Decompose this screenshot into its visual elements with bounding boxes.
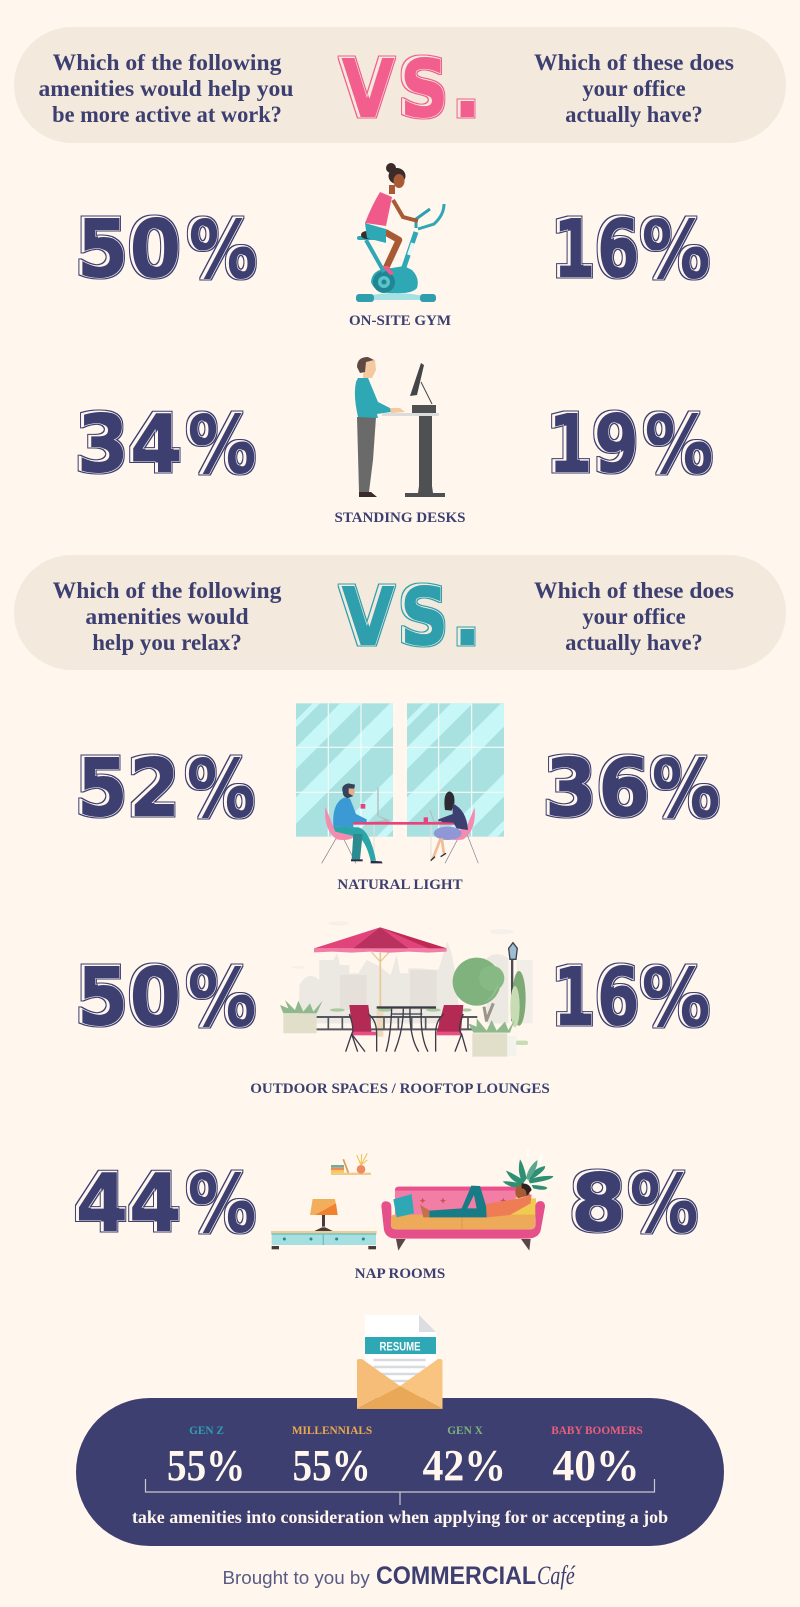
stat: 34% want standing desks xyxy=(75,399,256,491)
question: office has (relax): your office xyxy=(582,604,686,630)
stat: 16% have on-site gym: 16 xyxy=(551,203,639,295)
footer: brought to you by: COMMERCIAL xyxy=(376,1562,536,1590)
question: active at work: amenities would help you xyxy=(39,76,293,102)
label: nap rooms: NAP ROOMS xyxy=(355,1266,445,1282)
question: office has xyxy=(534,50,734,127)
stat: 8% have nap rooms: % xyxy=(628,1158,698,1250)
heading: teal VS: . xyxy=(451,571,481,663)
stat: gen x: 42% xyxy=(422,1442,506,1490)
stat: gen x: GEN X xyxy=(447,1425,484,1437)
stat: 34% want standing desks: 34 xyxy=(75,399,182,490)
stat: 8% have nap rooms xyxy=(569,1157,698,1250)
icon: woman on exercise bike xyxy=(356,163,444,302)
caption: take amenities into consideration when applying for or accepting a job xyxy=(132,1507,668,1527)
stat: 44% want nap rooms: % xyxy=(186,1158,256,1250)
stat: 52% want natural light xyxy=(75,742,255,835)
panel: relax header xyxy=(14,555,786,670)
stat: millennials: MILLENNIALS xyxy=(292,1425,372,1437)
label: outdoor spaces: OUTDOOR SPACES / ROOFTOP LOUNGES xyxy=(250,1081,550,1097)
heading: pink VS: V xyxy=(340,43,394,135)
stat: 34% want standing desks: % xyxy=(186,399,256,491)
icon: resume in envelope xyxy=(357,1315,442,1409)
heading: teal VS: S xyxy=(398,571,448,663)
question: office has: Which of these does xyxy=(534,50,734,76)
icon: man at standing desk xyxy=(355,357,445,497)
footer: brought to you by: Brought to you by xyxy=(222,1567,370,1588)
stat: gen z: GEN Z xyxy=(189,1425,224,1437)
question: help you relax xyxy=(53,578,282,656)
stat: baby boomers: BABY BOOMERS xyxy=(551,1425,643,1437)
question: active at work: be more active at work? xyxy=(52,100,282,127)
question: office has (relax): Which of these does xyxy=(534,578,734,604)
question: office has: actually have? xyxy=(565,100,703,127)
stat: 36% have natural light: 36 xyxy=(543,743,650,834)
stat: 52% want natural light: 52 xyxy=(75,742,179,834)
stat: 50% want outdoor spaces: % xyxy=(186,952,256,1044)
stat: baby boomers: 40% xyxy=(552,1442,640,1490)
label: on-site gym: ON-SITE GYM xyxy=(349,313,451,329)
question: active at work xyxy=(39,50,293,127)
stat: 16% have on-site gym: % xyxy=(640,204,710,296)
stat: 19% have standing desks: 19 xyxy=(546,398,638,490)
label: standing desks: STANDING DESKS xyxy=(334,510,466,526)
label: natural light: NATURAL LIGHT xyxy=(337,877,463,893)
question: active at work: Which of the following xyxy=(53,50,282,76)
stat: 50% want outdoor spaces: 50 xyxy=(75,952,181,1043)
panel: active header xyxy=(14,27,786,143)
stat: 36% have natural light: % xyxy=(650,743,720,835)
icon: two people at table by windows xyxy=(296,703,504,863)
stat: 50% want on-site gym xyxy=(75,204,257,296)
stat: 52% want natural light: % xyxy=(185,743,255,835)
stat: gen z: 55% xyxy=(167,1442,245,1491)
icon: resume in envelope: RESUME xyxy=(380,1341,421,1354)
question: office has (relax) xyxy=(534,578,734,655)
stat: 16% have outdoor spaces: % xyxy=(640,952,710,1044)
stat: 50% want outdoor spaces xyxy=(75,952,256,1044)
panel: generations xyxy=(76,1398,724,1546)
footer: brought to you by: Café xyxy=(537,1562,576,1591)
question: help you relax: Which of the following xyxy=(53,578,282,604)
stat: millennials: 55% xyxy=(292,1442,371,1491)
heading: pink VS: S xyxy=(398,43,448,135)
question: help you relax: help you relax? xyxy=(92,630,242,656)
stat: 44% want nap rooms: 44 xyxy=(74,1158,181,1249)
stat: 19% have standing desks: % xyxy=(643,399,713,491)
icon: man napping on sofa xyxy=(271,1147,553,1251)
stat: 36% have natural light xyxy=(543,743,720,835)
stat: 8% have nap rooms: 8 xyxy=(569,1157,626,1249)
icon: rooftop terrace with umbrella xyxy=(280,921,533,1057)
stat: 19% have standing desks xyxy=(546,398,713,491)
heading: pink VS xyxy=(340,43,481,135)
stat: 50% want on-site gym: % xyxy=(187,204,257,296)
stat: 16% have outdoor spaces: 16 xyxy=(551,951,639,1043)
heading: pink VS: . xyxy=(451,43,481,135)
heading: teal VS xyxy=(340,571,481,663)
question: office has: your office xyxy=(582,76,686,102)
heading: teal VS: V xyxy=(340,571,394,663)
question: help you relax: amenities would xyxy=(85,604,249,630)
stat: 50% want on-site gym: 50 xyxy=(75,204,181,295)
stat: 16% have outdoor spaces xyxy=(551,951,710,1044)
stat: 16% have on-site gym xyxy=(551,203,710,296)
question: office has (relax): actually have? xyxy=(565,628,703,655)
footer: brought to you by xyxy=(222,1562,576,1591)
stat: 44% want nap rooms xyxy=(74,1158,256,1250)
